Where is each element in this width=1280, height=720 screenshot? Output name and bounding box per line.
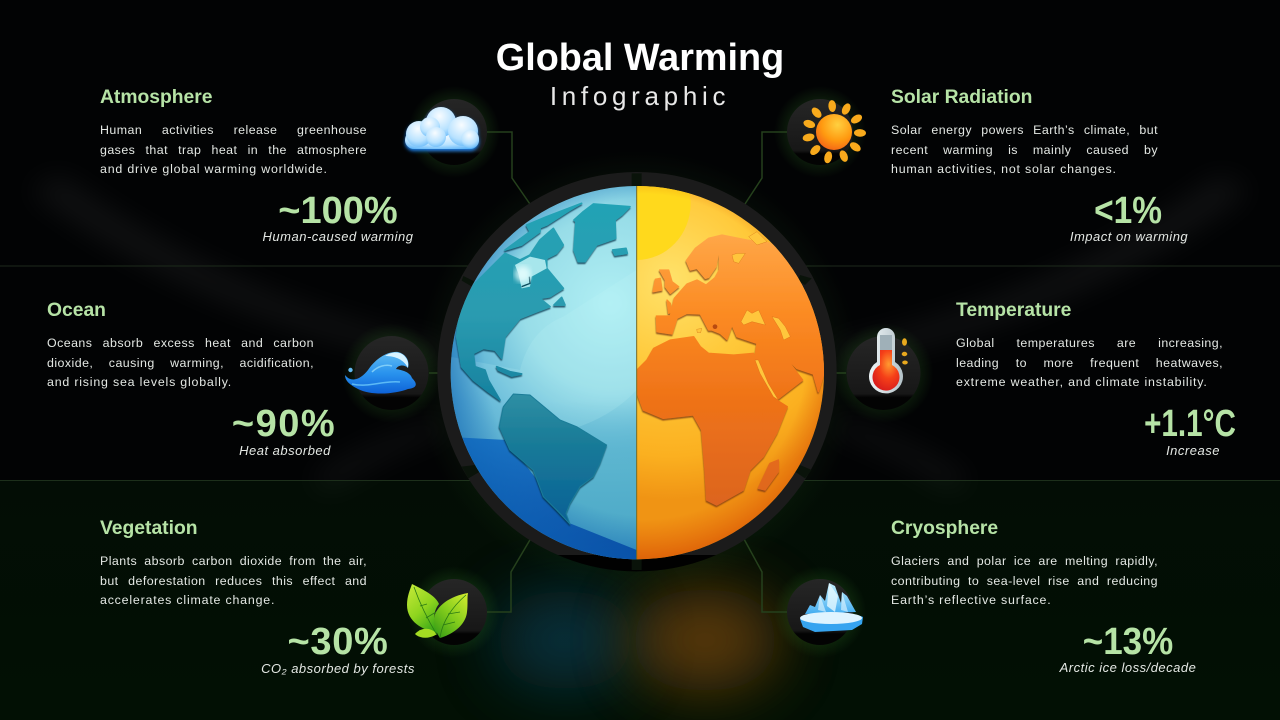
text block: Glaciers and polar ice are melting rapidly,: [891, 554, 1158, 568]
heading: Cryosphere: [891, 518, 998, 539]
text block: recent warming is mainly caused by: [891, 143, 1158, 157]
stat: ~100%: ~100%: [278, 190, 398, 232]
text block: Human activities release greenhouse: [100, 123, 367, 137]
panel: ocean: [47, 300, 314, 389]
text block: Solar energy powers Earth’s climate, but: [891, 123, 1158, 137]
icon: thermometer badge: [846, 328, 920, 410]
panel: temperature: [956, 300, 1223, 389]
icon: leaves badge: [407, 579, 487, 645]
text block: extreme weather, and climate instability.: [956, 375, 1208, 389]
text block: Plants absorb carbon dioxide from the air,: [100, 554, 367, 568]
text block: but deforestation reduces this effect and: [100, 574, 367, 588]
heading: Solar Radiation: [891, 87, 1032, 108]
stat label: CO₂ absorbed by forests: [261, 661, 415, 676]
stat label: Impact on warming: [1070, 229, 1188, 244]
stat: <1%: <1%: [1094, 190, 1162, 232]
text block: [956, 336, 1223, 389]
stat: ~13%: ~13%: [1083, 621, 1173, 663]
text block: dioxide, causing warming, acidification,: [47, 356, 314, 370]
left hemisphere: cool: [450, 186, 824, 560]
text block: contributing to sea-level rise and reducing: [891, 574, 1158, 588]
panel: vegetation: [100, 518, 367, 607]
panel: cryosphere: [891, 518, 1158, 607]
heading: Atmosphere: [100, 87, 212, 108]
ring: [444, 173, 830, 570]
stat label: Increase: [1166, 443, 1220, 458]
text block: [100, 554, 367, 607]
text block: leading to more frequent heatwaves,: [956, 356, 1223, 370]
heading: Global Warming: Global Warming: [496, 37, 784, 79]
text block: Global temperatures are increasing,: [956, 336, 1223, 350]
continents: Eurasia and Africa: [636, 232, 843, 505]
heading: Temperature: [956, 300, 1071, 321]
text block: [891, 554, 1158, 607]
stat label: Human-caused warming: [263, 229, 413, 244]
text block: and drive global warming worldwide.: [100, 162, 328, 176]
text block: and rising sea levels globally.: [47, 375, 232, 389]
text block: accelerates climate change.: [100, 593, 275, 607]
heading: Vegetation: [100, 518, 198, 539]
text block: [47, 336, 314, 389]
stat: +1.1°C: +1.1°C: [1144, 403, 1236, 445]
text block: [891, 123, 1158, 176]
stat label: Heat absorbed: [239, 443, 331, 458]
stat label: Arctic ice loss/decade: [1060, 660, 1196, 675]
subheading: Infographic: Infographic: [550, 81, 730, 111]
text block: Oceans absorb excess heat and carbon: [47, 336, 314, 350]
text block: [100, 123, 367, 176]
icon: iceberg badge: [787, 579, 863, 645]
text block: Earth’s reflective surface.: [891, 593, 1051, 607]
globe: [437, 172, 837, 572]
title: [496, 37, 784, 111]
right hemisphere: warm: [636, 186, 824, 560]
panel: atmosphere: [100, 87, 367, 176]
text block: gases that trap heat in the atmosphere: [100, 143, 367, 157]
stat: ~90%: ~90%: [232, 403, 336, 445]
stat: ~30%: ~30%: [287, 621, 389, 663]
icon: cloud badge: [402, 99, 487, 165]
continents: Americas: [457, 203, 630, 524]
heading: Ocean: [47, 300, 106, 321]
icon: sun badge: [787, 99, 866, 165]
icon: ocean wave badge: [345, 336, 428, 410]
text block: human activities, not solar changes.: [891, 162, 1117, 176]
panel: solar radiation: [891, 87, 1158, 176]
